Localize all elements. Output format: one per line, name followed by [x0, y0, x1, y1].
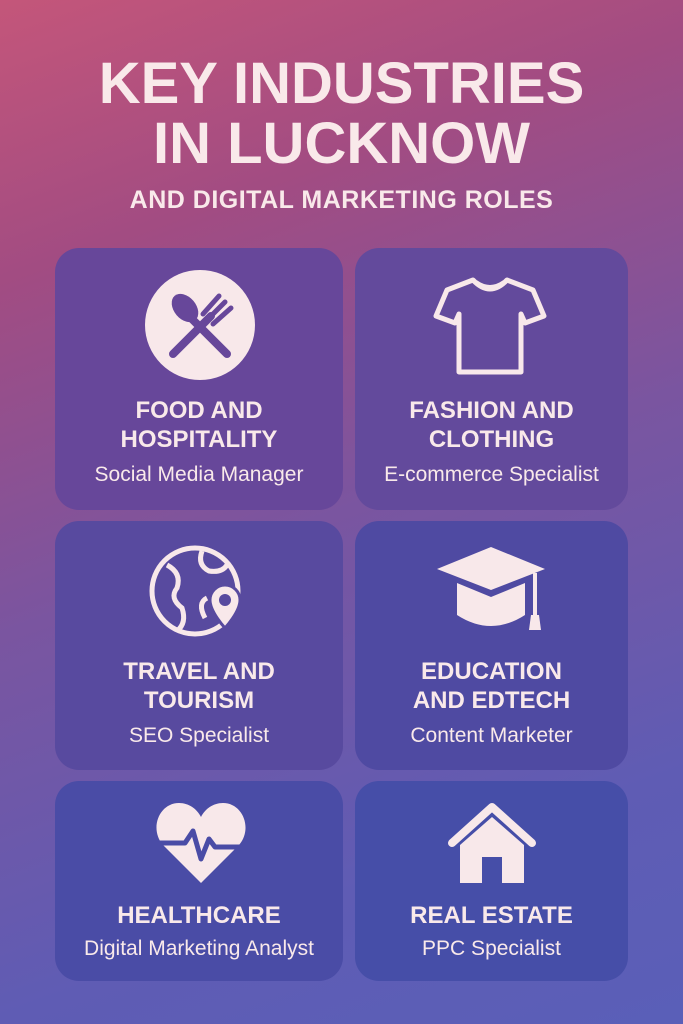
panel: travel: TRAVEL AND	[123, 658, 275, 685]
panel: fashion: E-commerce Specialist	[384, 463, 599, 486]
icon: t-shirt	[434, 278, 546, 374]
panel: food	[55, 248, 343, 510]
title: KEY INDUSTRIES	[99, 51, 584, 116]
panel: real estate: REAL ESTATE	[410, 902, 573, 929]
panel: real estate: PPC Specialist	[422, 937, 561, 960]
panel: healthcare	[55, 781, 343, 981]
icon: fork spoon	[145, 270, 255, 380]
panel: real estate	[355, 781, 628, 981]
panel: fashion: FASHION AND	[409, 397, 574, 424]
title	[99, 51, 584, 176]
icon: heart	[156, 803, 246, 883]
panel: travel: TOURISM	[144, 687, 254, 714]
panel: travel	[55, 521, 343, 770]
icon: grad cap	[437, 547, 545, 630]
subtitle: AND DIGITAL MARKETING ROLES	[130, 186, 553, 214]
panel: travel: SEO Specialist	[129, 724, 269, 747]
panel: education: EDUCATION	[421, 658, 562, 685]
panel: healthcare: Digital Marketing Analyst	[84, 937, 314, 960]
panel: fashion: CLOTHING	[429, 426, 554, 453]
panel: education	[355, 521, 628, 770]
panel: food: Social Media Manager	[95, 463, 303, 486]
icon: globe pin	[150, 546, 240, 636]
title: IN LUCKNOW	[153, 111, 530, 176]
panel: education: Content Marketer	[410, 724, 573, 747]
panel: food: HOSPITALITY	[121, 426, 277, 453]
panel: fashion	[355, 248, 628, 510]
panel: healthcare: HEALTHCARE	[117, 902, 281, 929]
panel: food: FOOD AND	[135, 397, 263, 424]
icon: house	[448, 803, 536, 883]
panel: education: AND EDTECH	[413, 687, 570, 714]
